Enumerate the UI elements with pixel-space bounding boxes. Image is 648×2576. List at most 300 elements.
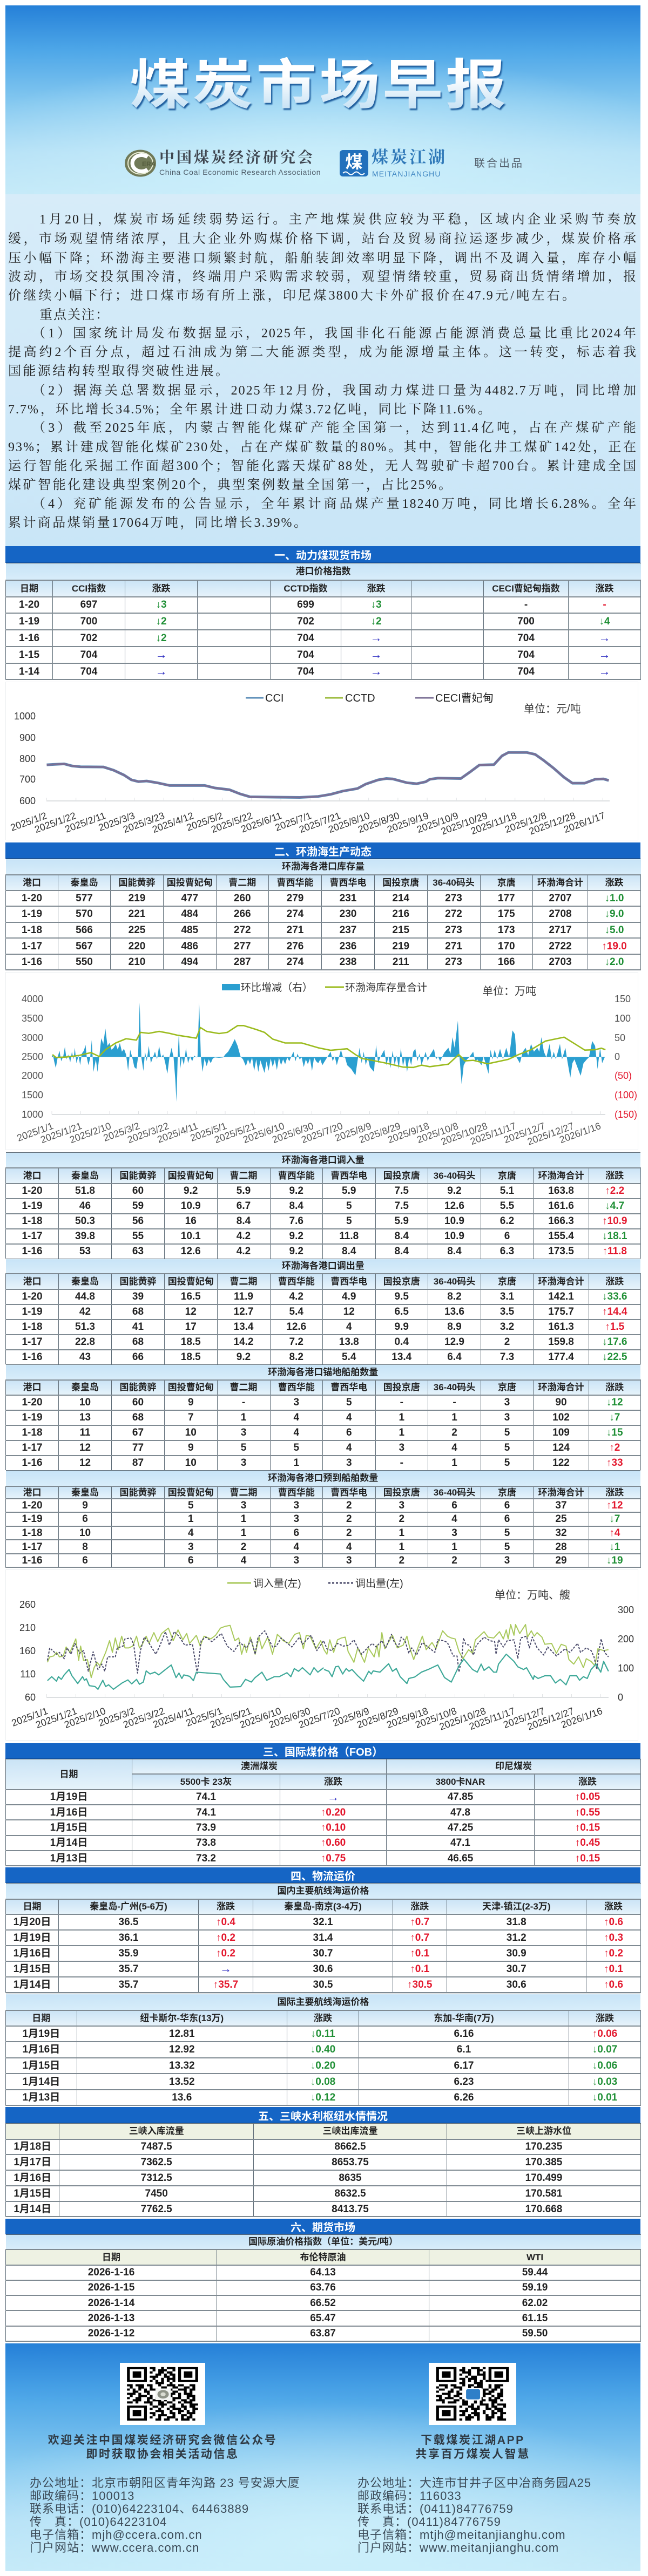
table: port price index: 704 <box>297 666 314 677</box>
table: port outflow: 11.9 <box>234 1291 253 1302</box>
x axis dates: 2025/1/21 <box>34 1705 78 1730</box>
table: port inventory: 220 <box>129 941 145 952</box>
panel: 三峡水利枢纽水情情况 <box>5 2107 641 2217</box>
table: Three Gorges water levels: 三峡出库流量 <box>322 2126 377 2136</box>
table: anchored vessels: 122 <box>552 1457 570 1469</box>
table: port inflow: 5 <box>346 1200 352 1212</box>
table: port price index: 704 <box>297 649 314 661</box>
table: port inflow: 6 <box>504 1231 510 1242</box>
table: port outflow: 6.5 <box>395 1306 409 1317</box>
table: port inflow: 6.3 <box>500 1246 514 1257</box>
table: FOB prices: 74.1 <box>196 1791 216 1803</box>
text block: market summary: 重点关注： <box>39 308 110 322</box>
table: anchored vessels: 77 <box>132 1442 144 1453</box>
x axis dates: 2025/3/22 <box>126 1120 170 1145</box>
table: port inflow: 5.9 <box>395 1215 409 1227</box>
table: expected vessels: 36-40码头 <box>434 1487 475 1497</box>
table: domestic freight: 35.7 <box>119 1979 138 1990</box>
table: FOB prices: 73.8 <box>196 1837 216 1848</box>
table: anchored vessels: 10 <box>185 1427 197 1438</box>
table: FOB prices: ↑0.55 <box>575 1807 600 1818</box>
table: port inflow: 12.6 <box>181 1246 201 1257</box>
table: anchored vessels: 9 <box>188 1397 194 1408</box>
table: Three Gorges water levels: 8632.5 <box>334 2188 366 2199</box>
table: port inventory: 287 <box>234 956 251 968</box>
table: FOB prices: 日期 <box>59 1769 78 1779</box>
table: port inflow: 173.5 <box>548 1246 574 1257</box>
table: domestic freight: 31.8 <box>507 1916 526 1928</box>
table: expected vessels: 6 <box>451 1500 457 1511</box>
table: port inventory: 550 <box>76 956 93 968</box>
y axis labels <box>14 711 36 806</box>
left axis labels: 60 <box>25 1692 36 1703</box>
table: anchored vessels: 67 <box>132 1427 144 1438</box>
table: domestic freight: ↑35.7 <box>213 1979 238 1990</box>
table: anchored vessels: ↓15 <box>606 1427 623 1438</box>
table: port outflow: 1-18 <box>22 1321 43 1333</box>
table: expected vessels: ↑12 <box>606 1500 623 1511</box>
table: port inventory: 177 <box>498 893 515 904</box>
table: FOB prices: 5500卡 23灰 <box>180 1777 232 1786</box>
table: port outflow: 12 <box>343 1306 355 1317</box>
table: port inflow: 曹西华能 <box>278 1170 315 1181</box>
table: port inflow: 12.6 <box>444 1200 464 1212</box>
x axis dates: 2025/5/22 <box>210 810 254 835</box>
table: anchored vessels: 港口 <box>23 1382 41 1392</box>
Meitan Jianghu contact details: 办公地址：大连市甘井子区中冶商务园A25 <box>357 2476 591 2490</box>
unit label: 单位：万吨、艘 <box>495 1589 570 1601</box>
table: international freight: ↓0.06 <box>592 2060 617 2071</box>
table: port outflow: 7.3 <box>500 1351 514 1363</box>
right axis labels: 150 <box>615 994 631 1004</box>
heading: section four <box>5 1867 640 1883</box>
table: port outflow: 4.2 <box>289 1291 303 1302</box>
table: port price index: 700 <box>517 616 535 627</box>
left axis labels: 1000 <box>22 1109 43 1120</box>
table: port outflow: 环渤海合计 <box>538 1276 584 1287</box>
table: port inventory: 1-19 <box>22 908 42 920</box>
table: expected vessels: 港口 <box>23 1487 41 1497</box>
table: port inventory: 271 <box>445 941 462 952</box>
table: international freight: 12.81 <box>169 2028 195 2040</box>
CERA contact details: 电子信箱：mjh@ccera.com.cn <box>30 2528 202 2541</box>
table: domestic freight: 36.5 <box>119 1916 138 1928</box>
x axis dates: 2025/1/2 <box>9 810 48 833</box>
chart legend: 环比增减（右） <box>241 982 313 994</box>
table: FOB prices: 涨跌 <box>324 1777 342 1786</box>
table: anchored vessels: 涨跌 <box>605 1382 624 1392</box>
table: domestic freight: 国内主要航线海运价格 <box>278 1886 369 1896</box>
y axis labels: 800 <box>19 753 36 764</box>
x axis dates: 2025/4/11 <box>156 1120 199 1145</box>
text block: market summary: 累计商品煤销量17064万吨，同比增长3.39%。 <box>8 516 308 530</box>
table: port outflow: 14.2 <box>233 1336 253 1348</box>
chart legend: CCTD <box>345 692 375 704</box>
table: port inventory: 2708 <box>549 908 572 920</box>
table: international freight: 6.1 <box>457 2044 471 2055</box>
left axis labels: 2500 <box>22 1051 43 1062</box>
x axis dates <box>10 1705 604 1732</box>
table: port inflow: 1-17 <box>22 1231 43 1242</box>
table: FOB prices: → <box>327 1790 339 1804</box>
table: FOB prices: 1月16日 <box>50 1807 87 1818</box>
x axis dates: 2025/12/27 <box>526 1705 575 1732</box>
x axis dates: 2025/5/1 <box>185 1705 224 1729</box>
table: port inflow: 9.2 <box>289 1231 303 1242</box>
table: Three Gorges water levels: 7762.5 <box>141 2204 172 2215</box>
table: port inventory: 216 <box>392 908 409 920</box>
table: anchored vessels: 3 <box>504 1412 510 1423</box>
icon: CERA logo: ERA <box>142 160 156 168</box>
table: port outflow: 4.9 <box>342 1291 356 1302</box>
table: crude oil prices: 66.52 <box>310 2298 336 2309</box>
table: port inventory: 274 <box>287 908 303 920</box>
x axis dates: 2026/1/16 <box>558 1120 602 1145</box>
table: expected vessels: ↓1 <box>609 1541 620 1553</box>
table: expected vessels: 3 <box>293 1500 299 1511</box>
table: port price index: → <box>599 648 611 661</box>
x axis dates: 2025/5/1 <box>189 1120 228 1144</box>
table: anchored vessels: 36-40码头 <box>434 1382 475 1392</box>
table: port inflow: 国投曹妃甸 <box>168 1170 214 1181</box>
heading: section four: 四、物流运价 <box>291 1871 355 1882</box>
table: port price index: 涨跌 <box>596 583 614 594</box>
x axis dates: 2025/9/18 <box>386 1120 430 1145</box>
table: port outflow: 8.2 <box>447 1291 462 1302</box>
icon: Meitan Jianghu logo <box>340 150 368 176</box>
table: port inflow: 5 <box>346 1215 352 1227</box>
table: expected vessels: 1-17 <box>22 1541 43 1553</box>
table: port inflow: 环渤海各港口调入量 <box>282 1155 364 1165</box>
table: port price index: 702 <box>80 633 97 644</box>
CERA WeChat invitation: 欢迎关注中国煤炭经济研究会微信公众号 <box>48 2434 277 2446</box>
table: port outflow: ↓33.6 <box>602 1291 627 1302</box>
table: port price index: 1-20 <box>19 599 39 610</box>
table: anchored vessels: 109 <box>552 1427 570 1438</box>
x axis dates: 2025/3/2 <box>97 1705 136 1729</box>
joint production note: 联合出品 <box>474 158 524 169</box>
table: international freight: 13.52 <box>169 2076 195 2088</box>
x axis dates: 2025/11/17 <box>469 1120 517 1147</box>
table: port outflow: 5.4 <box>342 1351 356 1363</box>
table: port inventory: 221 <box>129 908 145 920</box>
table: port price index: → <box>156 664 167 678</box>
table: anchored vessels: 68 <box>132 1412 144 1423</box>
table: port inflow: 7.6 <box>289 1215 303 1227</box>
table: expected vessels: 4 <box>188 1527 194 1539</box>
table: international freight: ↑0.06 <box>592 2028 617 2040</box>
text block: market summary: 煤矿智能化建设典型案例20个，典型案例数量全国第一，占比25%。 <box>8 478 453 492</box>
table: domestic freight: 1月20日 <box>14 1916 51 1928</box>
CERA WeChat invitation <box>48 2434 277 2461</box>
table: domestic freight: ↑0.4 <box>216 1916 235 1928</box>
table: port outflow: 1-16 <box>22 1351 43 1363</box>
table: expected vessels: ↓7 <box>609 1513 620 1525</box>
table: port price index: → <box>370 631 382 644</box>
x axis dates: 2025/9/18 <box>385 1705 429 1730</box>
x axis dates: 2025/10/28 <box>440 1120 489 1147</box>
table: expected vessels: 曹西华电 <box>330 1487 367 1497</box>
table: domestic freight: 30.5 <box>313 1979 333 1990</box>
x axis dates: 2025/12/8 <box>503 810 548 835</box>
table: port inventory: ↓5.0 <box>605 925 624 936</box>
table: FOB prices: 47.8 <box>450 1807 470 1818</box>
table: anchored vessels: 5 <box>241 1442 246 1453</box>
table: anchored vessels: ↑2 <box>609 1442 620 1453</box>
table: anchored vessels: 6 <box>346 1427 352 1438</box>
table: port price index: 700 <box>80 616 97 627</box>
table: domestic freight: 1月19日 <box>14 1932 51 1943</box>
table: international freight: ↓0.40 <box>310 2044 335 2055</box>
table: expected vessels: 4 <box>293 1541 299 1553</box>
panel: 期货市场 <box>5 2219 641 2342</box>
table: port inflow: 11.8 <box>339 1231 359 1242</box>
app download invitation: 共享百万煤炭人智慧 <box>415 2448 530 2461</box>
table: expected vessels: 1-20 <box>22 1500 43 1511</box>
right axis labels: 100 <box>615 1013 631 1024</box>
table: Three Gorges water levels: 三峡上游水位 <box>516 2126 571 2136</box>
table: port inflow: ↓4.7 <box>605 1200 624 1212</box>
left axis labels: 2000 <box>22 1070 43 1081</box>
table: expected vessels: 4 <box>451 1513 457 1525</box>
table: anchored vessels: ↓12 <box>606 1397 623 1408</box>
table: anchored vessels: 1-17 <box>22 1442 43 1453</box>
table: port outflow: 7.2 <box>289 1336 303 1348</box>
y axis labels: 700 <box>19 774 36 785</box>
table: port outflow: 66 <box>132 1351 144 1363</box>
table: domestic freight: 30.7 <box>313 1947 333 1959</box>
table: port outflow: 18.5 <box>181 1336 201 1348</box>
text block: market summary: 价继续小幅下行；进口煤市场有所上涨，印尼煤3800大卡外矿报价在47.9元/吨左右。 <box>8 289 576 303</box>
app download invitation: 下载煤炭江湖APP <box>421 2434 525 2446</box>
table: port inflow: 曹二期 <box>230 1170 257 1181</box>
table: port outflow: 12 <box>185 1306 197 1317</box>
table: port inflow: 9.2 <box>289 1246 303 1257</box>
table: anchored vessels: 87 <box>132 1457 144 1469</box>
table: port inventory: 166 <box>498 956 515 968</box>
table: port inflow: 60 <box>132 1185 144 1197</box>
table: anchored vessels: 90 <box>555 1397 567 1408</box>
table: crude oil prices: 2026-1-14 <box>88 2298 134 2309</box>
table: port inventory: 国投京唐 <box>382 878 419 887</box>
table: port price index: 704 <box>80 666 97 677</box>
table: expected vessels: 6 <box>188 1555 194 1566</box>
table: port outflow: 4 <box>346 1321 352 1333</box>
table: expected vessels: 涨跌 <box>605 1487 624 1497</box>
table: port inflow: 56 <box>132 1215 144 1227</box>
table: expected vessels: 国投京唐 <box>383 1487 420 1497</box>
table: port outflow: 68 <box>132 1306 144 1317</box>
table: port inventory: ↓1.0 <box>605 893 624 904</box>
table: port inflow: 5.1 <box>500 1185 514 1197</box>
table: port outflow: 环渤海各港口调出量 <box>282 1261 364 1271</box>
table: expected vessels: 3 <box>346 1555 352 1566</box>
table: expected vessels: 3 <box>399 1500 404 1511</box>
chart legend: 调出量(左) <box>355 1578 403 1589</box>
table: port inventory: 1-20 <box>22 893 42 904</box>
table: port outflow: 18.5 <box>181 1351 201 1363</box>
table: port outflow: 5.4 <box>289 1306 303 1317</box>
table: port inventory: 173 <box>498 925 515 936</box>
table: port outflow: 175.7 <box>548 1306 574 1317</box>
table: port inflow: 50.3 <box>75 1215 95 1227</box>
table: port outflow: 曹西华电 <box>330 1276 367 1287</box>
table: expected vessels: 28 <box>555 1541 567 1553</box>
text block: market summary: 压小幅下降；环渤海主要港口频繁封航，船舶装卸效率明显下降，调出不及调入量，库存小幅 <box>8 252 637 266</box>
table: crude oil prices: 2026-1-15 <box>88 2282 134 2293</box>
table: international freight: 1月15日 <box>22 2060 60 2071</box>
table: FOB prices: 47.85 <box>448 1791 473 1803</box>
table: expected vessels: 2 <box>399 1555 404 1566</box>
table: port price index: ↓2 <box>370 616 382 627</box>
table: anchored vessels: 1-18 <box>22 1427 43 1438</box>
table: expected vessels: 环渤海各港口预到船舶数量 <box>268 1473 378 1483</box>
table: port price index: → <box>156 648 167 661</box>
x axis dates <box>9 810 606 837</box>
table: domestic freight: ↑0.1 <box>410 1947 429 1959</box>
panel: 动力煤现货市场 <box>5 546 641 840</box>
table: Three Gorges water levels: 1月14日 <box>14 2204 51 2215</box>
table: expected vessels: 2 <box>346 1527 352 1539</box>
x axis dates: 2025/8/10 <box>327 810 371 835</box>
right axis labels: 100 <box>618 1663 634 1674</box>
table: domestic freight: 32.1 <box>313 1916 333 1928</box>
x axis dates <box>16 1120 602 1147</box>
table: port inflow: 163.8 <box>548 1185 574 1197</box>
table: port price index: - <box>603 599 606 610</box>
table: port outflow: 9.5 <box>395 1291 409 1302</box>
table: anchored vessels: 4 <box>293 1427 299 1438</box>
table: port outflow: ↑1.5 <box>605 1321 624 1333</box>
table: port price index: 1-14 <box>19 666 39 677</box>
table: anchored vessels: - <box>453 1397 456 1408</box>
table: port price index: 涨跌 <box>367 583 386 594</box>
CERA contact details: 门户网站：www.ccera.com.cn <box>30 2541 199 2554</box>
table: anchored vessels: 曹西华能 <box>278 1382 315 1392</box>
table: Three Gorges water levels: 170.581 <box>525 2188 562 2199</box>
table: FOB prices: ↑0.15 <box>575 1822 600 1833</box>
table: port inflow <box>5 1152 640 1260</box>
table: crude oil prices: 63.76 <box>310 2282 336 2293</box>
heading: section three <box>5 1743 640 1759</box>
table: international freight <box>5 1994 641 2106</box>
table: port outflow: 43 <box>79 1351 91 1363</box>
x axis dates: 2025/12/7 <box>502 1120 546 1145</box>
table: port inventory: 230 <box>340 908 356 920</box>
table: expected vessels: 37 <box>555 1500 567 1511</box>
table: crude oil prices: 61.15 <box>522 2313 548 2324</box>
table: domestic freight: 30.6 <box>507 1979 526 1990</box>
table: port inventory: 港口 <box>23 878 41 887</box>
table: anchored vessels: 1-16 <box>22 1457 43 1469</box>
table: anchored vessels: 5 <box>504 1427 510 1438</box>
table: FOB prices: 澳洲煤炭 <box>241 1761 278 1771</box>
table: anchored vessels: 7 <box>188 1412 194 1423</box>
CERA contact details: 传 真：(010)64223104 <box>30 2515 167 2529</box>
table: international freight: 1月13日 <box>22 2092 60 2103</box>
table: expected vessels: 秦皇岛 <box>71 1487 99 1497</box>
table: port inflow: 5.9 <box>342 1185 356 1197</box>
chart legend: 环渤海库存量合计 <box>345 982 427 994</box>
table: domestic freight: 30.6 <box>313 1963 333 1974</box>
icon: CERA logo <box>125 150 156 177</box>
table: domestic freight: ↑0.6 <box>604 1979 623 1990</box>
x axis dates: 2026/1/16 <box>559 1705 604 1730</box>
table: anchored vessels: 1-20 <box>22 1397 43 1408</box>
table: domestic freight: 31.2 <box>507 1932 526 1943</box>
table: port inventory: 231 <box>340 893 356 904</box>
table: port inventory: 210 <box>129 956 145 968</box>
text block: market summary: 提高约2个百分点，超过石油成为第二大能源类型，成为能源增量主体。这一转变，标志着我 <box>8 345 637 359</box>
table: anchored vessels: 3 <box>346 1457 352 1469</box>
table: expected vessels <box>5 1470 640 1568</box>
footer panel <box>5 2343 640 2571</box>
table: expected vessels: 2 <box>451 1555 457 1566</box>
y axis labels: 1000 <box>14 711 36 722</box>
table: expected vessels: 京唐 <box>498 1487 516 1497</box>
table: port inventory: 2717 <box>549 925 572 936</box>
table: FOB prices: 1月19日 <box>50 1791 87 1803</box>
table: anchored vessels: 曹二期 <box>230 1382 257 1392</box>
table: port inventory: 271 <box>287 925 303 936</box>
table: international freight: 12.92 <box>169 2044 195 2055</box>
right axis labels: (150) <box>615 1109 637 1120</box>
table: port price index: 697 <box>80 599 97 610</box>
table: international freight: 6.26 <box>454 2092 474 2103</box>
table: international freight: 日期 <box>32 2013 50 2023</box>
table: port outflow: 22.8 <box>75 1336 95 1348</box>
unit label: 单位：万吨 <box>482 985 536 997</box>
table: FOB prices: 1月15日 <box>50 1822 87 1833</box>
unit label: 单位：元/吨 <box>524 703 581 715</box>
CERA English name: China Coal Economic Research Association <box>159 168 321 176</box>
table: anchored vessels: 秦皇岛 <box>71 1382 99 1392</box>
table: port inventory: 涨跌 <box>605 878 623 887</box>
table: international freight: ↓0.07 <box>592 2044 617 2055</box>
CERA WeChat invitation: 即时获取协会相关活动信息 <box>86 2448 239 2461</box>
text block: market summary: （4）兖矿能源发布的公告显示，全年累计商品煤产量18240万吨，同比增长6.28%。全年 <box>32 497 637 511</box>
table: expected vessels: 5 <box>504 1541 510 1553</box>
table: port inflow: 8.4 <box>395 1246 409 1257</box>
heading: section two <box>5 842 640 859</box>
table: port inventory: 566 <box>76 925 93 936</box>
table: port price index: 1-16 <box>19 633 39 644</box>
table: port inflow: 港口 <box>23 1170 41 1181</box>
table: international freight: 1月19日 <box>22 2028 60 2040</box>
chart legend: CCI <box>265 692 284 704</box>
y axis labels: 900 <box>19 732 36 743</box>
table: domestic freight: ↑0.1 <box>410 1963 429 1974</box>
combo chart: inventory and daily change <box>5 972 638 1150</box>
table: expected vessels: 曹二期 <box>230 1487 257 1497</box>
table: port inventory: 272 <box>445 908 462 920</box>
panel: 国际煤价格 <box>5 1743 641 1866</box>
table: port outflow <box>5 1259 640 1365</box>
table: port inventory: 486 <box>181 941 198 952</box>
table: port inflow: 国能黄骅 <box>120 1170 157 1181</box>
table: port outflow: ↓17.6 <box>602 1336 627 1348</box>
table: crude oil prices: 65.47 <box>310 2313 336 2324</box>
table: port inflow: 9.2 <box>289 1185 303 1197</box>
table: port inventory: 环渤海合计 <box>537 878 583 887</box>
icon: Meitan Jianghu logo: 煤 <box>345 152 363 172</box>
table: Three Gorges water levels <box>5 2123 641 2217</box>
x axis dates: 2025/11/17 <box>468 1705 516 1732</box>
left axis labels: 1500 <box>22 1090 43 1100</box>
table: expected vessels: 1 <box>399 1527 404 1539</box>
table: anchored vessels: 曹西华电 <box>330 1382 367 1392</box>
table: anchored vessels: - <box>400 1457 403 1469</box>
